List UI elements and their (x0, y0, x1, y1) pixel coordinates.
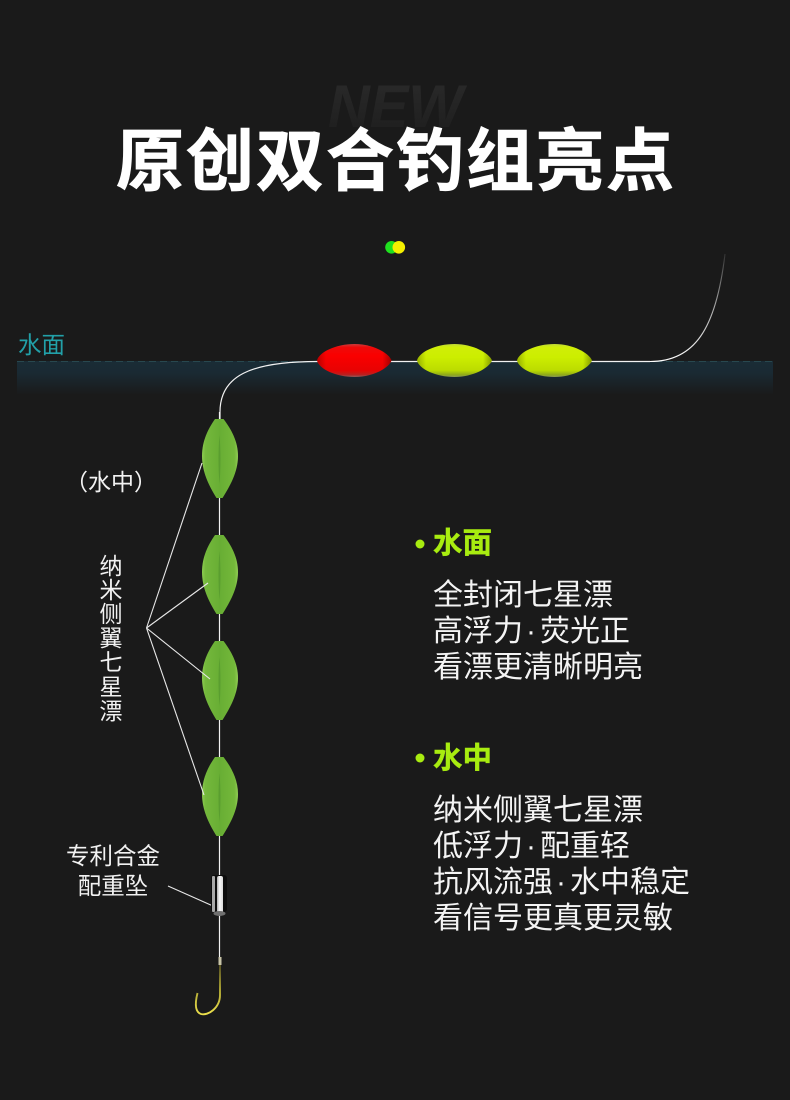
float: green underwater float 3 (202, 641, 238, 720)
text block: surface features: · (526, 615, 536, 648)
watermark: NEW: NEW (328, 73, 467, 140)
text block: surface features: 看漂更清晰明亮 (433, 651, 643, 684)
label: patented alloy weight: 专利合金 (66, 843, 160, 869)
fishing line: surface section (220, 254, 725, 420)
title: 原创双合钓组亮点 (116, 124, 674, 200)
label: nano side-wing seven star float (vertical): 漂 (100, 698, 122, 724)
leader lines from label to green floats (146, 463, 210, 795)
float: green underwater float 4 (202, 757, 238, 836)
bullet: surface (416, 540, 424, 548)
text block: surface features: 荧光正 (540, 615, 630, 648)
leader line to weight (168, 886, 213, 906)
icon: green and yellow indicator dots (385, 241, 405, 254)
float: lime surface float 1 (417, 344, 492, 377)
label: patented alloy weight (66, 843, 160, 899)
panel: underwater features (416, 742, 690, 935)
float: red surface float (317, 344, 392, 377)
heading: surface: 水面 (433, 527, 492, 560)
label: nano side-wing seven star float (vertical): 侧 (100, 601, 122, 627)
text block: underwater features: 看信号更真更灵敏 (433, 902, 673, 935)
label: patented alloy weight: 配重坠 (78, 873, 148, 899)
fishing line: underwater section (218, 412, 220, 962)
text block: surface features: 高浮力 (433, 615, 523, 648)
heading: underwater: 水中 (433, 742, 492, 775)
label: underwater: （水中） (65, 469, 157, 495)
text block: underwater features: 低浮力 (433, 830, 523, 863)
panel: surface features (416, 527, 643, 684)
text block: underwater features: · (556, 866, 566, 899)
float: green underwater float 2 (202, 535, 238, 614)
label: nano side-wing seven star float (vertical): 纳 (100, 553, 122, 579)
water band (17, 361, 773, 395)
text block: underwater features: 水中稳定 (570, 866, 690, 899)
label: nano side-wing seven star float (vertical) (100, 553, 122, 724)
label: nano side-wing seven star float (vertical): 米 (100, 577, 122, 603)
float: lime surface float 2 (517, 344, 592, 377)
text block: underwater features: 抗风流强 (433, 866, 553, 899)
label: nano side-wing seven star float (vertical): 星 (100, 674, 122, 700)
icon: alloy weight (211, 875, 227, 916)
text block: surface features: 全封闭七星漂 (433, 579, 613, 612)
text block: underwater features: 纳米侧翼七星漂 (433, 794, 643, 827)
text block: underwater features (433, 794, 690, 935)
text block: underwater features: 配重轻 (540, 830, 630, 863)
text block: surface features (433, 579, 643, 684)
text block: underwater features: · (526, 830, 536, 863)
bullet: underwater (416, 754, 424, 762)
label: nano side-wing seven star float (vertical): 七 (100, 649, 122, 675)
float: green underwater float 1 (202, 419, 238, 498)
label: water surface: 水面 (18, 332, 65, 358)
label: nano side-wing seven star float (vertical): 翼 (100, 625, 122, 651)
icon: fishing hook (196, 957, 222, 1014)
